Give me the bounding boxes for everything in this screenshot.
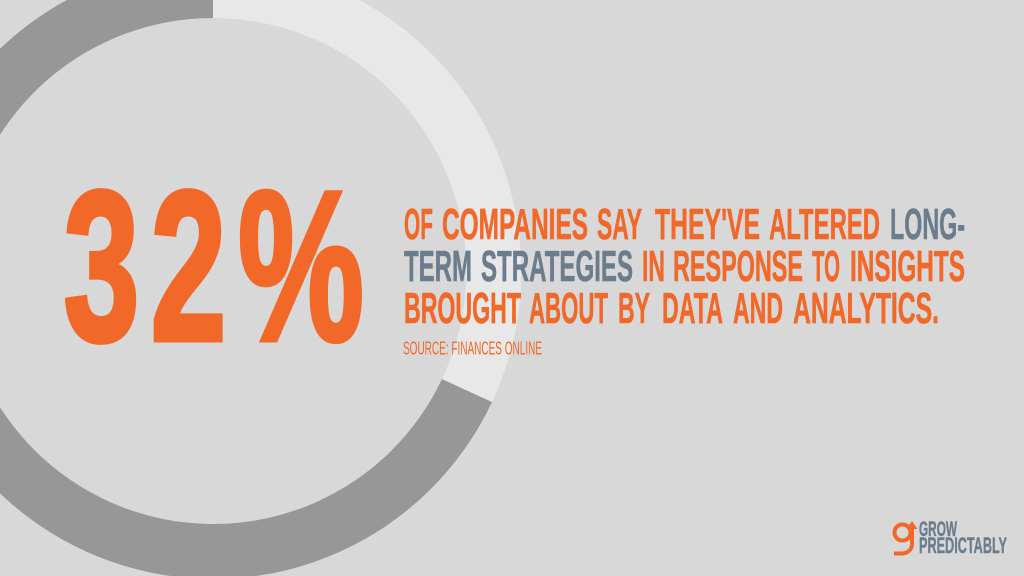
headline line 3: [404, 285, 939, 333]
headline line 2: RESPONSE: [673, 243, 803, 291]
headline line 1: THEY'VE: [655, 201, 760, 249]
big statistic: 32%: [64, 147, 364, 386]
headline line 2: IN: [642, 243, 665, 291]
big statistic: 32%: %: [238, 147, 364, 386]
headline line 3: DATA: [662, 285, 723, 333]
headline line 3: BY: [618, 285, 650, 333]
headline line 1: OF: [404, 201, 433, 249]
logo wordmark: GROW: [919, 518, 957, 541]
headline line 2: STRATEGIES: [481, 243, 633, 291]
ring segment: 32% light grey: [213, 0, 521, 402]
source note: SOURCE: FINANCES ONLINE: [403, 338, 542, 358]
headline text: [404, 201, 965, 333]
headline line 3: AND: [733, 285, 783, 333]
headline line 2: TERM: [404, 243, 472, 291]
headline line 2: [404, 243, 965, 291]
headline line 1: ALTERED: [769, 201, 880, 249]
ring segment: 68% dark grey: [0, 0, 492, 576]
logo wordmark: [919, 518, 1007, 558]
headline line 1: COMPANIES: [442, 201, 588, 249]
big statistic: 32%: 2: [150, 147, 226, 386]
headline line 3: BROUGHT: [404, 285, 521, 333]
headline line 1: SAY: [597, 201, 642, 249]
logo: Grow Predictably: [894, 518, 1007, 558]
donut chart ring: [0, 0, 521, 576]
icon: g with up arrow: [894, 521, 918, 554]
big statistic: 32%: 3: [64, 147, 140, 386]
headline line 3: ABOUT: [529, 285, 608, 333]
headline line 1: [404, 201, 965, 249]
headline line 2: TO: [812, 243, 840, 291]
